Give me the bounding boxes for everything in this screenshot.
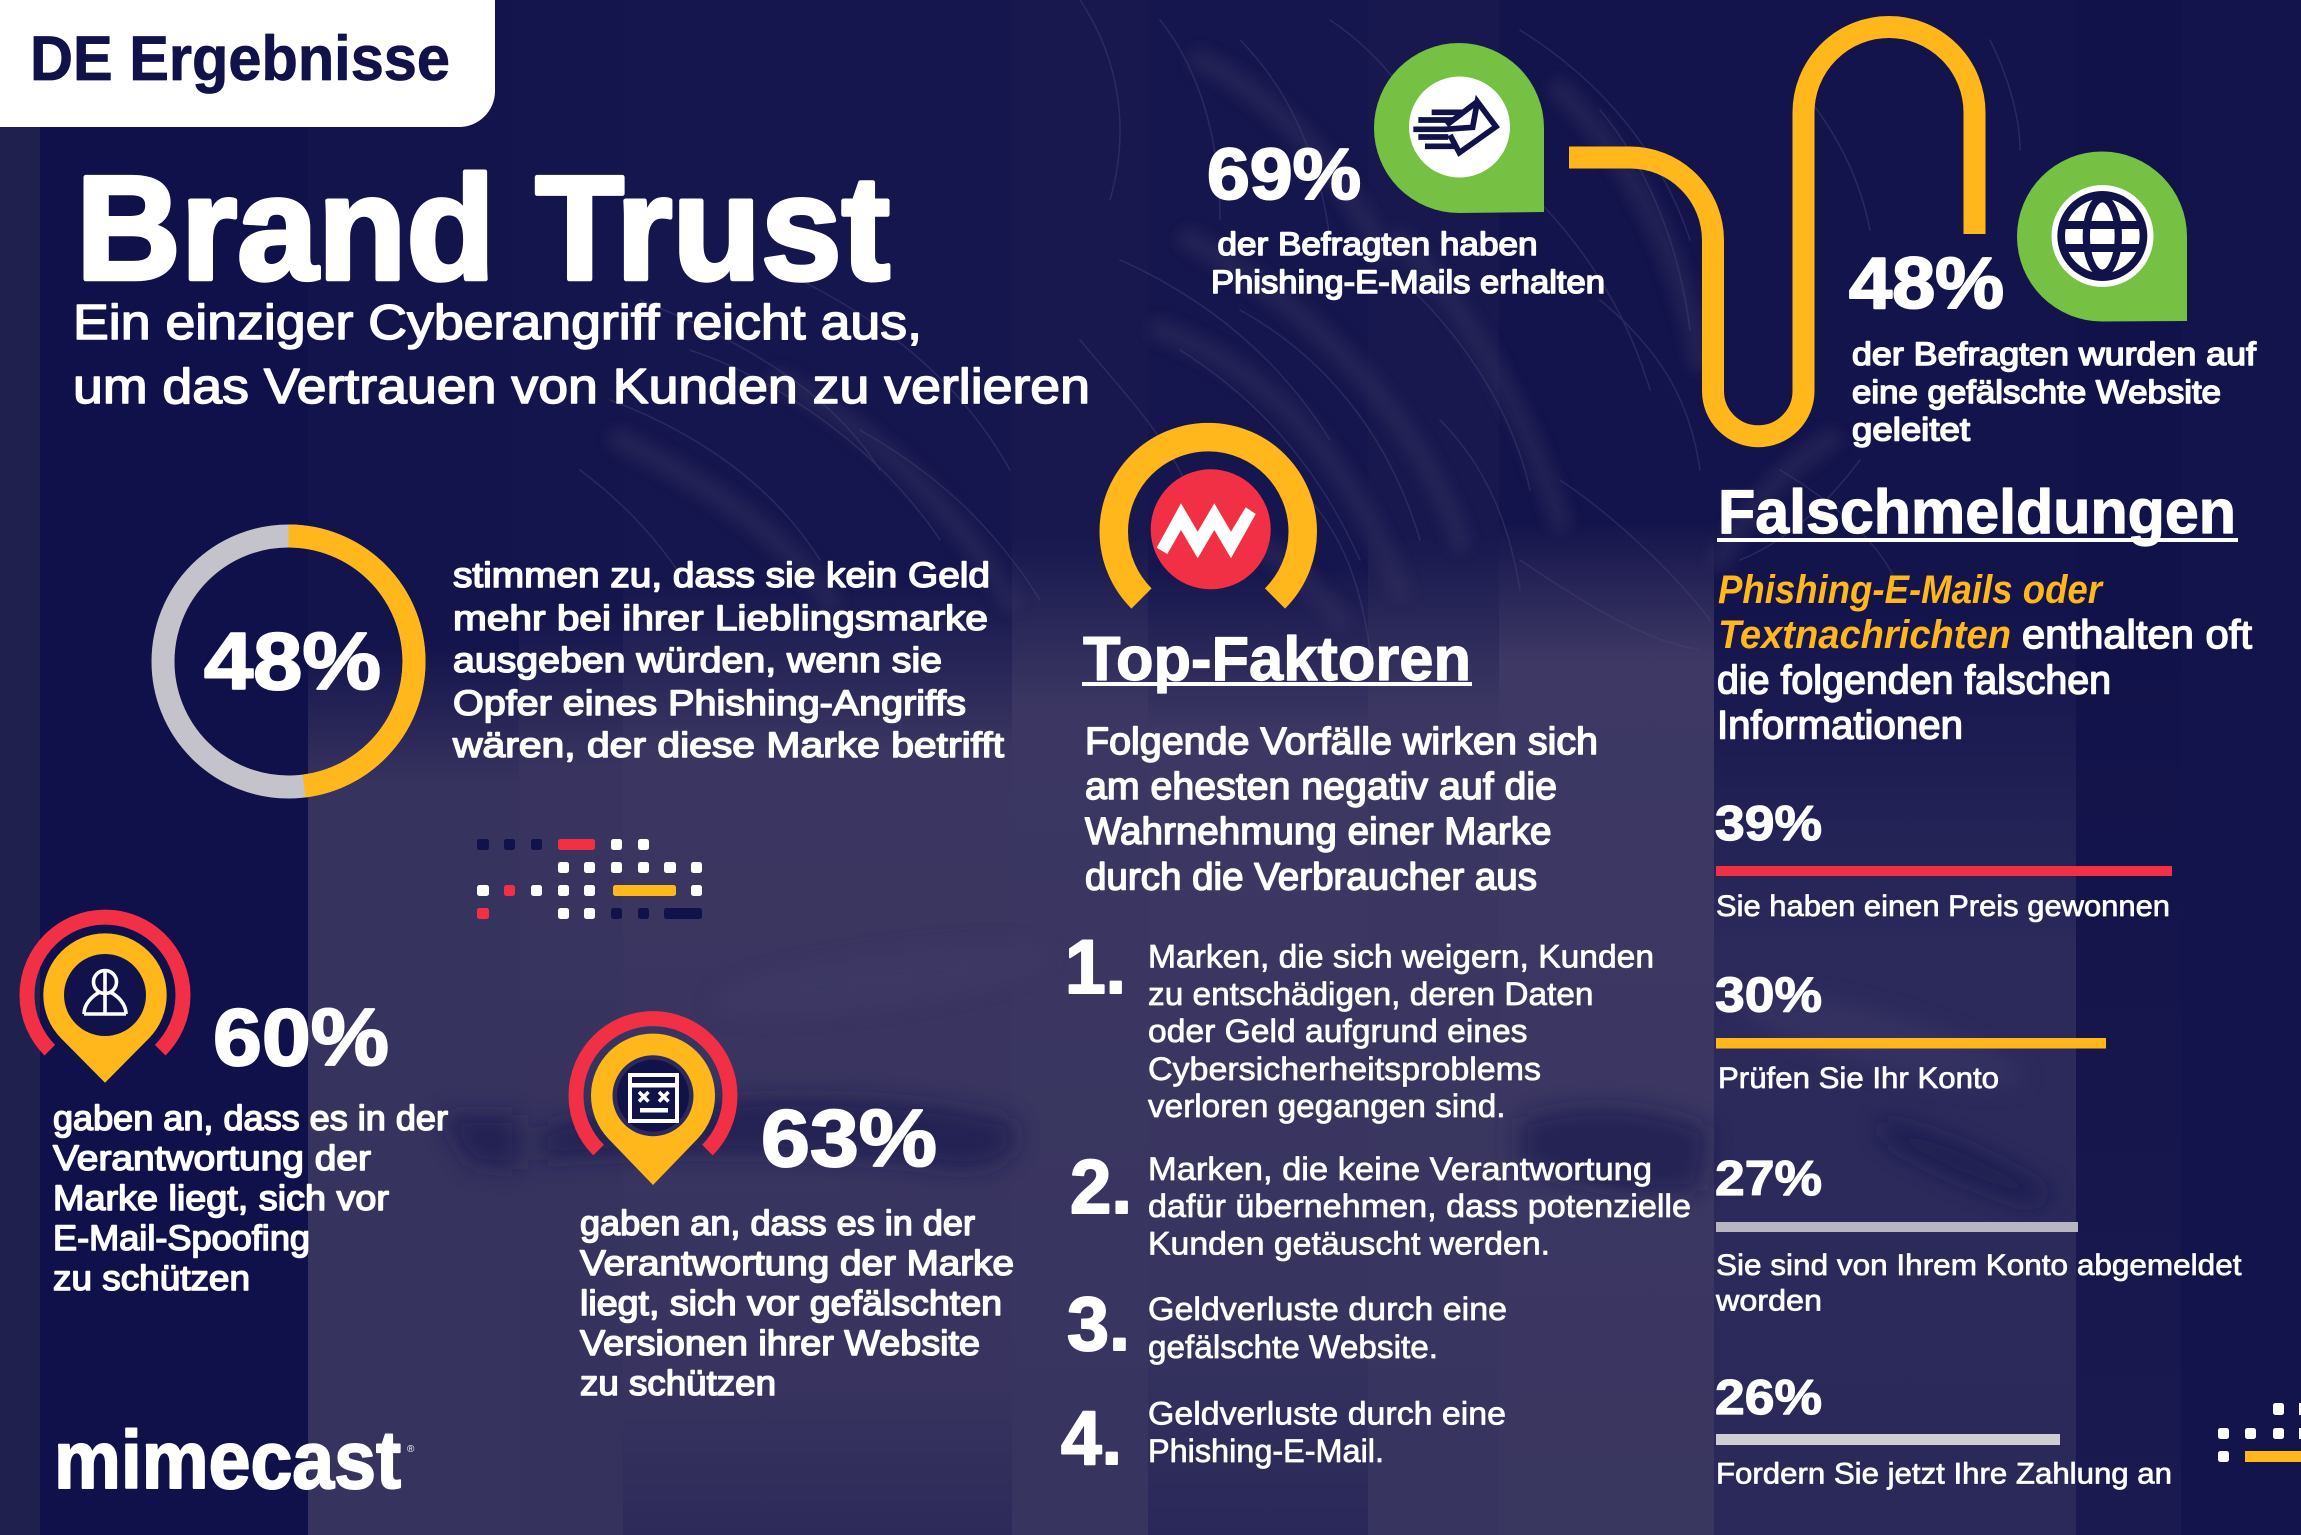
list item 1: Marken, die sich weigern, Kunden <box>1148 938 1654 974</box>
text block: fake website responsibility: Versionen ihrer Website <box>580 1324 980 1363</box>
list item 1: 1. <box>1065 925 1126 1010</box>
text block: email spoofing responsibility: zu schützen <box>53 1259 250 1298</box>
icon: map pin with browser window <box>576 1019 730 1185</box>
subtitle <box>73 296 1090 414</box>
list item 4: 4. <box>1061 1396 1122 1481</box>
text block: fake website responsibility: Verantwortung der Marke <box>580 1244 1014 1283</box>
list item 2: Marken, die keine Verantwortung <box>1148 1151 1652 1187</box>
donut chart: 48%: 48% <box>204 617 381 707</box>
text block: fake website responsibility: zu schützen <box>580 1364 776 1403</box>
text block: brand loyalty <box>452 556 1004 765</box>
donut chart: 48% <box>163 536 414 787</box>
bar: 27%: worden <box>1715 1284 1822 1318</box>
bar: 30%: Prüfen Sie Ihr Konto <box>1718 1062 1999 1095</box>
text block: email spoofing responsibility: gaben an, dass es in der <box>53 1099 448 1138</box>
subtitle: Ein einziger Cyberangriff reicht aus, <box>73 296 922 350</box>
list item 3: Geldverluste durch eine <box>1148 1291 1507 1327</box>
list item 1: Cybersicherheitsproblems <box>1148 1051 1541 1087</box>
text block: Falschmeldungen intro: Informationen <box>1717 704 1963 748</box>
text block: brand loyalty: Opfer eines Phishing-Angriffs <box>453 684 966 723</box>
text block: fake website redirects: der Befragten wurden auf <box>1852 336 2256 372</box>
text block: Falschmeldungen intro: Textnachrichten <box>1718 613 2011 657</box>
text block: email spoofing responsibility <box>53 1099 448 1298</box>
dot pattern decoration <box>477 839 702 919</box>
text block: phishing emails received: der Befragten haben <box>1218 226 1538 262</box>
stat: 63%: 63% <box>761 1094 937 1184</box>
text block: Falschmeldungen intro: die folgenden falschen <box>1717 658 2111 702</box>
title: Brand Trust <box>76 146 890 311</box>
list item 2: dafür übernehmen, dass potenzielle <box>1148 1188 1691 1224</box>
list item 1: verloren gegangen sind. <box>1148 1088 1506 1124</box>
text block: fake website responsibility: liegt, sich vor gefälschten <box>580 1284 1002 1323</box>
stat: 69%: 69% <box>1207 135 1361 215</box>
list item 3: gefälschte Website. <box>1148 1329 1438 1365</box>
list item 3 <box>1067 1282 1507 1367</box>
icon: green pin with globe <box>2017 152 2187 322</box>
dot pattern decoration, corner <box>2218 1403 2301 1462</box>
text block: brand loyalty: ausgeben würden, wenn sie <box>453 641 942 680</box>
text block: phishing emails received <box>1211 226 1605 300</box>
text block: phishing emails received: Phishing-E-Mails erhalten <box>1211 264 1605 300</box>
list item 4 <box>1061 1396 1506 1481</box>
icon: gauge with red pulse <box>1114 437 1303 598</box>
bar: 39%: 39% <box>1715 797 1822 851</box>
logo: mimecast: mimecast <box>54 1415 401 1506</box>
bar: 27%: Sie sind von Ihrem Konto abgemeldet <box>1716 1249 2242 1282</box>
text block: fake website responsibility <box>580 1204 1014 1403</box>
text block: fake website redirects <box>1852 336 2256 448</box>
stat: 60%: 60% <box>213 993 389 1083</box>
text block: Top-Faktoren intro <box>1085 721 1598 898</box>
tab: DE Ergebnisse: DE Ergebnisse <box>30 24 450 94</box>
subtitle: um das Vertrauen von Kunden zu verlieren <box>73 360 1090 414</box>
bar: 30%: 30% <box>1715 968 1822 1022</box>
list item 3: 3. <box>1067 1282 1130 1367</box>
list item 2 <box>1070 1145 1691 1262</box>
text block: brand loyalty: mehr bei ihrer Lieblingsmarke <box>453 599 988 638</box>
arrow: winding yellow line <box>1569 27 1974 436</box>
text block: Top-Faktoren intro: durch die Verbraucher aus <box>1085 856 1537 898</box>
text block: email spoofing responsibility: Marke liegt, sich vor <box>53 1179 389 1218</box>
text block: fake website redirects: geleitet <box>1852 412 1970 448</box>
bar: 27% <box>1715 1152 2242 1318</box>
bar: 26% <box>1715 1371 2172 1491</box>
text block: fake website redirects: eine gefälschte Website <box>1852 374 2221 410</box>
bar: 26%: 26% <box>1715 1371 1822 1425</box>
list item 4: Phishing-E-Mail. <box>1148 1433 1384 1469</box>
bar: 27%: 27% <box>1715 1152 1822 1206</box>
list item 1: oder Geld aufgrund eines <box>1148 1013 1528 1049</box>
text block: Top-Faktoren intro: Folgende Vorfälle wirken sich <box>1085 721 1598 763</box>
bar: 39% <box>1715 797 2172 923</box>
bar: 26%: Fordern Sie jetzt Ihre Zahlung an <box>1716 1458 2172 1491</box>
icon: map pin with person <box>27 917 183 1083</box>
list item 1: zu entschädigen, deren Daten <box>1148 976 1594 1012</box>
text block: Falschmeldungen intro <box>1717 568 2252 748</box>
bar: 39%: Sie haben einen Preis gewonnen <box>1716 890 2170 923</box>
text block: Top-Faktoren intro: Wahrnehmung einer Marke <box>1085 811 1552 853</box>
text block: brand loyalty: wären, der diese Marke betrifft <box>452 726 1004 765</box>
text block: brand loyalty: stimmen zu, dass sie kein Geld <box>453 556 990 595</box>
text block: fake website responsibility: gaben an, dass es in der <box>580 1204 975 1243</box>
heading: Falschmeldungen: Falschmeldungen <box>1718 478 2236 547</box>
text block: Falschmeldungen intro: enthalten oft <box>2022 613 2252 657</box>
text block: email spoofing responsibility: E-Mail-Spoofing <box>53 1219 310 1258</box>
logo: mimecast: ® <box>407 1444 415 1455</box>
list item 1 <box>1065 925 1654 1124</box>
tab: DE Ergebnisse <box>0 0 495 127</box>
text block: email spoofing responsibility: Verantwortung der <box>53 1139 371 1178</box>
list item 2: Kunden getäuscht werden. <box>1148 1226 1550 1262</box>
text block: Falschmeldungen intro: Phishing-E-Mails oder <box>1718 568 2104 612</box>
stat: 48%: 48% <box>1849 244 2004 324</box>
list item 2: 2. <box>1070 1145 1132 1230</box>
list item 4: Geldverluste durch eine <box>1148 1396 1506 1432</box>
heading: Top-Faktoren: Top-Faktoren <box>1083 625 1471 694</box>
bar: 30% <box>1715 968 2106 1095</box>
icon: green pin with envelope <box>1374 43 1544 213</box>
text block: Top-Faktoren intro: am ehesten negativ auf die <box>1085 766 1557 808</box>
